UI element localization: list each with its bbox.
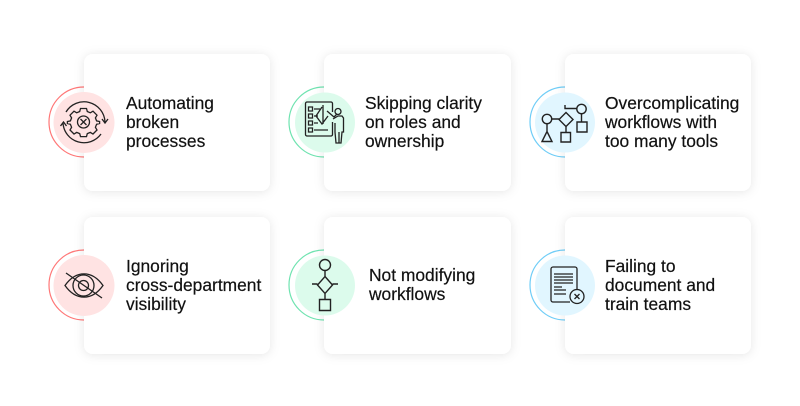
label: Ignoring [126,256,189,276]
icon: gear with cycle arrows [60,102,108,143]
icon: person presenting a checklist [306,102,344,143]
icon disc: red [54,255,114,316]
label: broken [126,112,179,132]
icon ring: green arc [289,250,324,320]
icon disc: green [295,92,355,152]
panel: automating broken processes [49,54,270,191]
label: Not modifying [369,265,475,285]
label: Overcomplicating [605,93,739,113]
label: visibility [126,294,186,314]
card 1 [84,54,270,191]
card 5 [324,217,511,354]
icon ring: red arc [49,87,84,157]
icon disc: blue [535,92,595,152]
icon: document with cross badge [551,267,584,304]
card 4 [84,217,270,354]
card 3 [565,54,751,191]
panel: failing to document and train [530,217,751,354]
label: ownership [365,131,444,151]
label: workflows [368,284,446,304]
label: too many tools [605,131,718,151]
icon ring: blue arc [530,250,565,320]
icon: vertical flowchart [312,260,338,310]
icon ring: green arc [289,87,324,157]
icon ring: blue arc [530,87,565,157]
icon: flowchart shapes [542,104,587,142]
icon disc: green [295,256,355,316]
panel: not modifying workflows [289,217,511,354]
label: train teams [605,294,691,314]
label: processes [126,131,206,151]
card 6 [565,217,751,354]
label: Failing to [605,256,676,276]
icon ring: red arc [49,250,84,320]
panel: ignoring cross-department visibility [49,217,270,354]
icon: crossed-out eye [65,273,103,298]
label: Skipping clarity [365,93,482,113]
label: Automating [126,93,214,113]
panel: skipping clarity on roles [289,54,511,191]
icon disc: red [54,92,114,153]
label: document and [605,275,715,295]
icon disc: blue [535,256,595,316]
panel: overcomplicating workflows [530,54,751,191]
label: workflows with [604,112,717,132]
label: on roles and [365,112,461,132]
label: cross-department [126,275,261,295]
card 2 [324,54,511,191]
